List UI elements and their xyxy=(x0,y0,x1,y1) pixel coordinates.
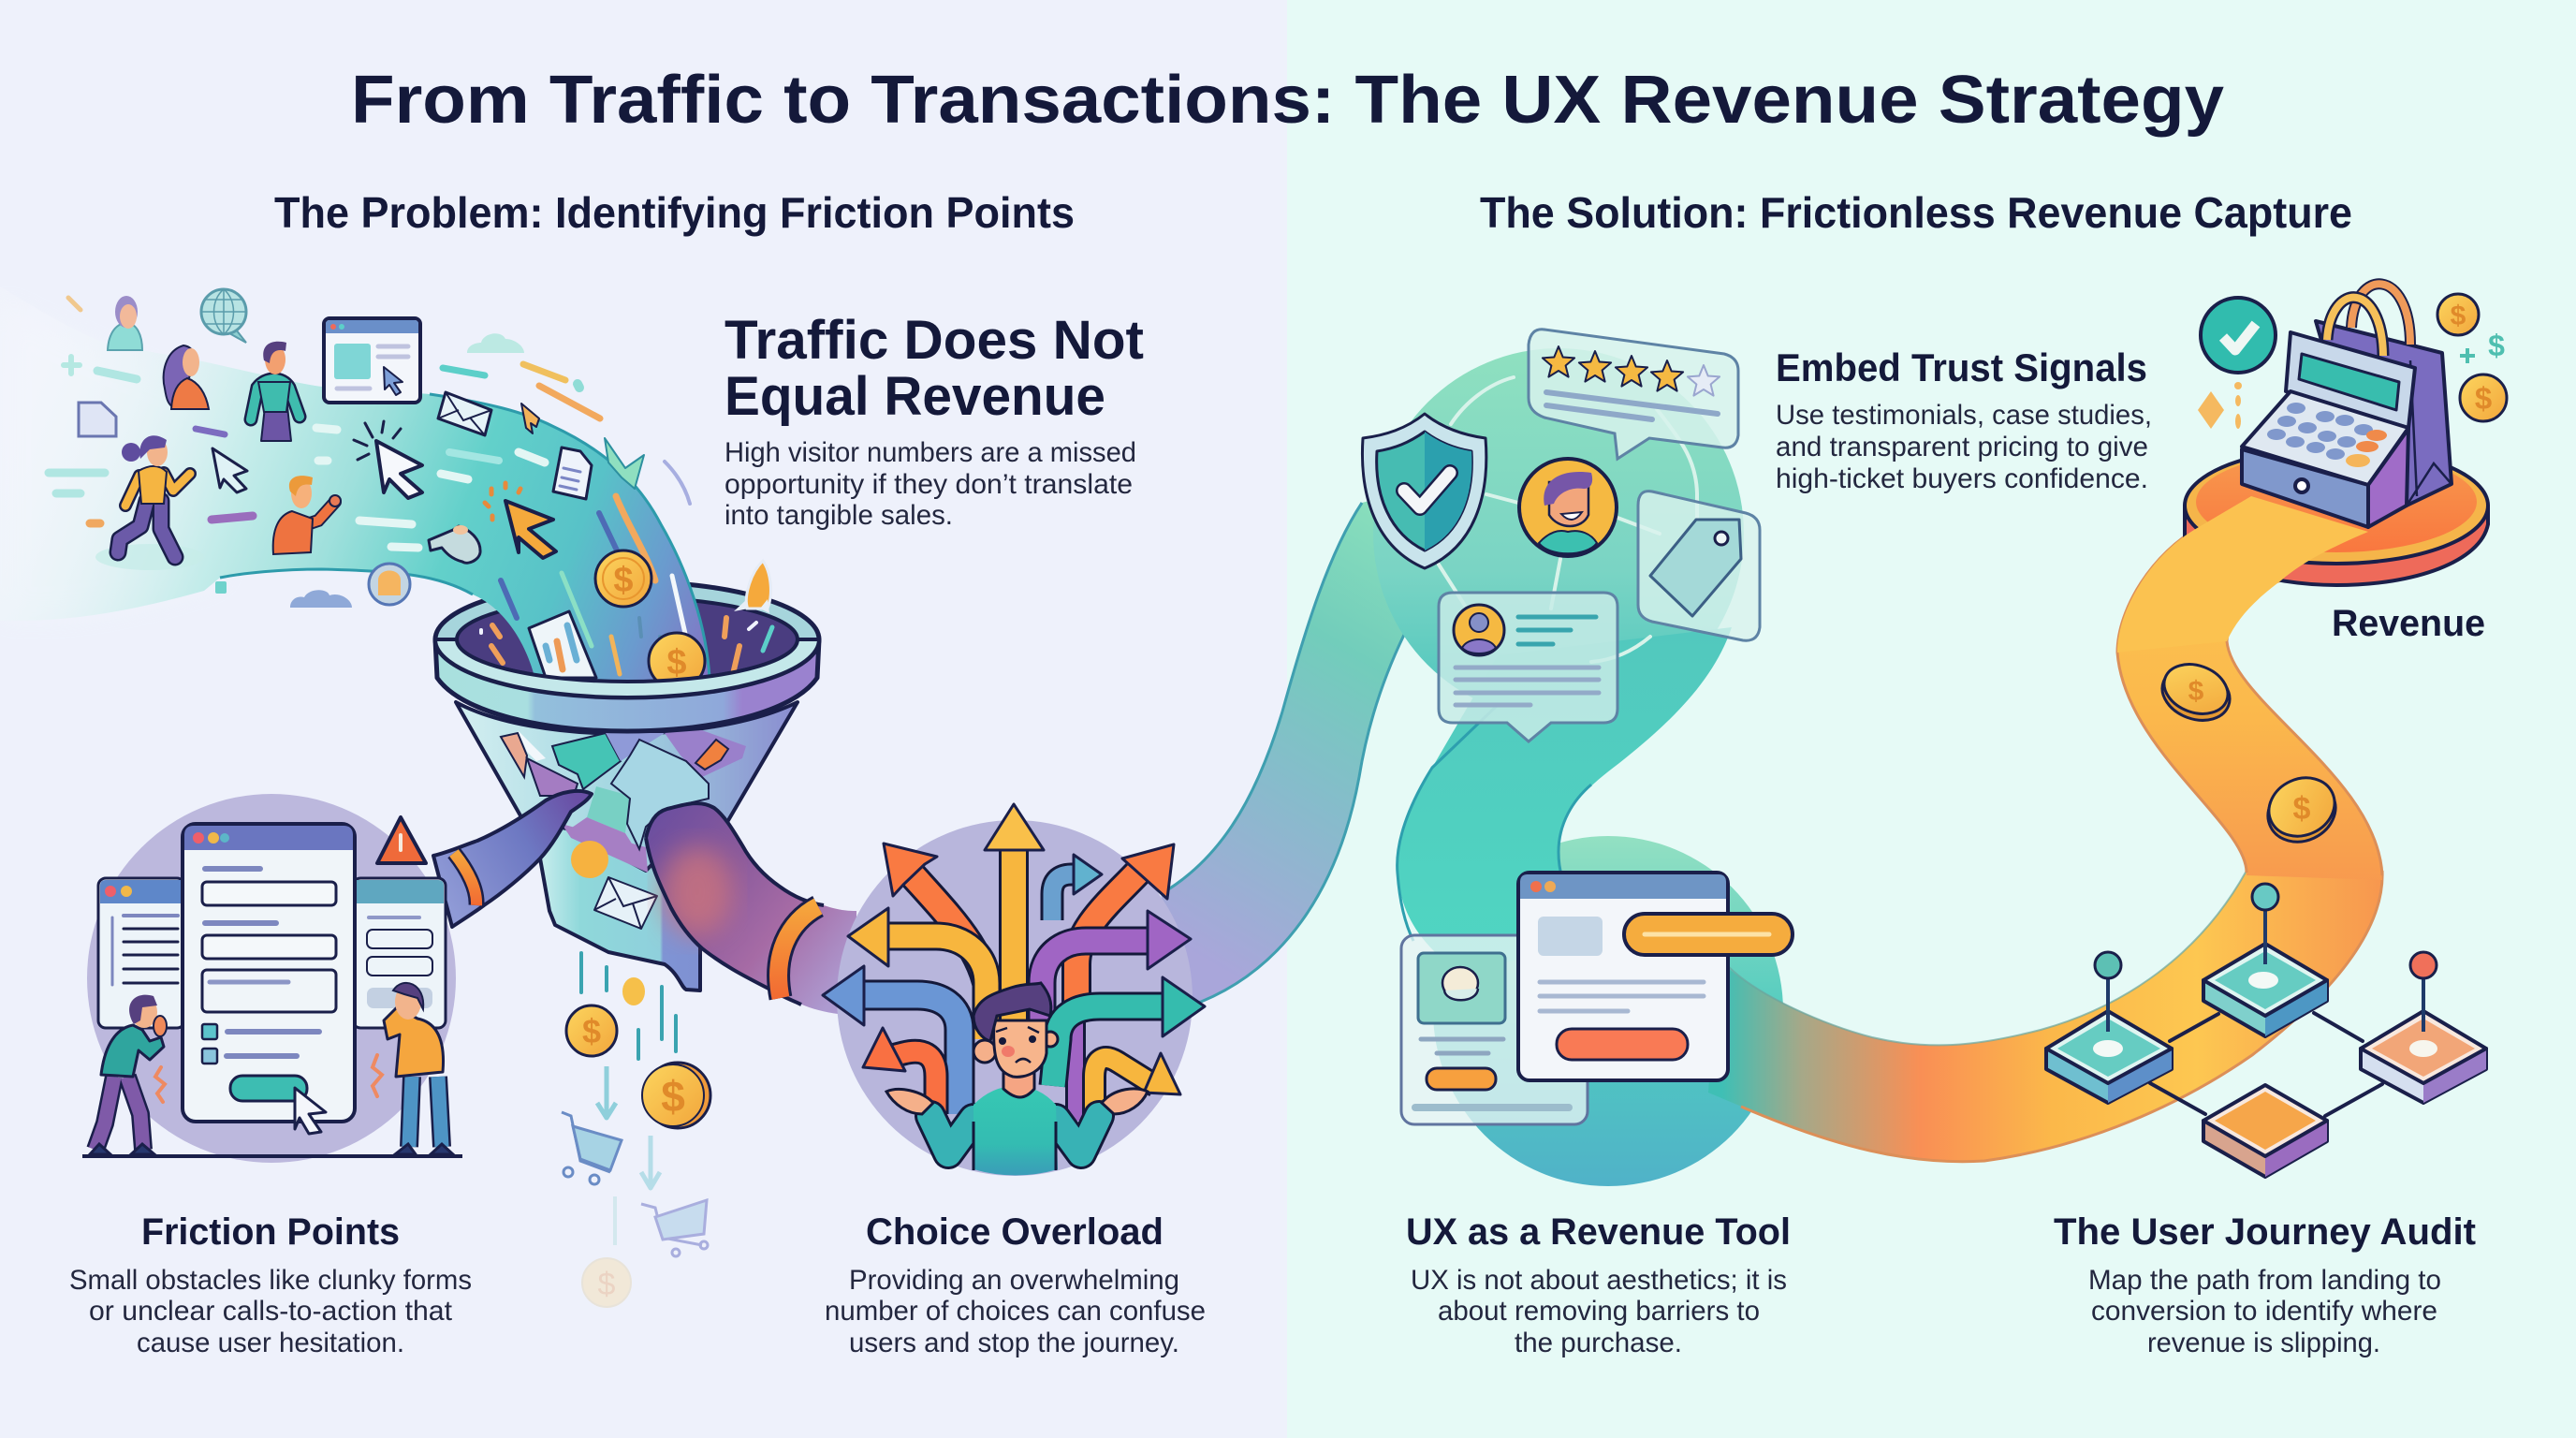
floor line xyxy=(82,1154,462,1158)
label: revenue: Revenue xyxy=(2332,603,2485,644)
text block: choice overload: users and stop the journey. xyxy=(849,1328,1179,1358)
lilac circle xyxy=(837,820,1193,1176)
text block: embed trust signals: Use testimonials, case studies, xyxy=(1776,400,2152,431)
text block: the user journey audit xyxy=(2054,1211,2476,1358)
icon: envelope xyxy=(438,392,491,435)
arrow: small orange left xyxy=(863,1028,936,1114)
text block: traffic does not equal revenue: Equal Revenue xyxy=(724,366,1105,427)
lilac circle xyxy=(87,794,456,1163)
revenue channel: teal curve xyxy=(1398,627,1732,974)
icon: shopping cart xyxy=(562,1112,622,1184)
text block: the user journey audit: The User Journey Audit xyxy=(2054,1211,2476,1253)
icon: file xyxy=(79,403,116,436)
icon: hand pointer xyxy=(429,525,480,563)
text block: friction points: cause user hesitation. xyxy=(137,1328,404,1358)
text block: embed trust signals xyxy=(1776,345,2152,494)
panel: friction points illustration xyxy=(82,794,462,1163)
background: right solution panel xyxy=(1287,0,2576,1438)
person: confused user xyxy=(886,983,1148,1176)
funnel back rim xyxy=(435,581,819,697)
icon: faded coin xyxy=(582,1258,631,1307)
text block: embed trust signals: high-ticket buyers confidence. xyxy=(1776,463,2148,494)
text block: embed trust signals: Embed Trust Signals xyxy=(1776,345,2147,389)
stream dashes xyxy=(49,298,690,674)
funnel front rim xyxy=(435,639,819,731)
shield with check xyxy=(1362,414,1486,568)
text block: choice overload xyxy=(825,1211,1206,1358)
funnel confetti xyxy=(481,618,772,674)
register xyxy=(2242,298,2415,527)
icon: large coin xyxy=(642,1063,710,1128)
icon: coin on path xyxy=(2155,656,2237,729)
line faded xyxy=(613,1196,617,1245)
icon: teal dollar and plus: $ xyxy=(2488,329,2505,362)
icon: avatar xyxy=(108,296,142,350)
stream band xyxy=(0,286,710,688)
falling coins and carts xyxy=(562,953,710,1307)
person: man in orange xyxy=(273,476,341,554)
person: left frustrated user xyxy=(90,995,167,1154)
text block: friction points: Friction Points xyxy=(141,1211,400,1253)
text block: friction points xyxy=(69,1211,472,1358)
price tag card xyxy=(1638,492,1760,640)
right pipe from funnel to choice panel xyxy=(646,803,856,1016)
node: bottom xyxy=(2203,1085,2327,1177)
platform xyxy=(2185,448,2488,585)
arrow: small yellow right xyxy=(1094,1053,1180,1119)
text block: traffic does not equal revenue xyxy=(724,310,1144,531)
heading: the problem: The Problem: Identifying Friction Points xyxy=(274,188,1075,237)
icon: coin xyxy=(566,1005,617,1056)
text block: friction points: or unclear calls-to-action that xyxy=(89,1296,453,1327)
text block: UX as a revenue tool: UX as a Revenue Tool xyxy=(1406,1211,1791,1253)
wisp haze xyxy=(0,300,225,619)
icon: orange tag xyxy=(521,404,539,433)
person: man in teal xyxy=(251,342,300,441)
text block: UX as a revenue tool: about removing barriers to xyxy=(1438,1296,1760,1327)
text block: UX as a revenue tool xyxy=(1406,1211,1791,1358)
text block: friction points: Small obstacles like clunky forms xyxy=(69,1265,472,1296)
icon: coin in stream xyxy=(595,550,651,607)
icon: rocket xyxy=(734,561,770,613)
warning triangle xyxy=(377,817,426,863)
arrow: purple right xyxy=(1042,911,1191,1030)
arrow: teal right xyxy=(1053,977,1205,1086)
icon: browser window xyxy=(324,318,420,403)
arrow: blue left xyxy=(823,966,959,1114)
icon: coin in funnel: $ xyxy=(666,643,687,682)
panel: user journey audit illustration xyxy=(2046,884,2486,1177)
icon: coin on path: $ xyxy=(2188,676,2204,707)
node: right xyxy=(2361,952,2486,1103)
icon: coin: $ xyxy=(582,1012,601,1050)
icon: lower cloud xyxy=(290,590,352,608)
stream edges xyxy=(430,394,710,679)
icon: document xyxy=(553,448,592,499)
panel: traffic stream xyxy=(0,286,819,990)
icon: sparkle xyxy=(2198,382,2242,429)
arrow: small blue turn xyxy=(1052,855,1102,920)
funnel cone xyxy=(456,702,798,871)
icon: coin lower xyxy=(2460,374,2507,421)
icon: check badge xyxy=(2201,298,2276,373)
background: left problem panel xyxy=(0,0,1287,1438)
text block: UX as a revenue tool: UX is not about aesthetics; it is xyxy=(1411,1265,1787,1296)
panel: trust signals icons xyxy=(1362,330,1760,741)
left window xyxy=(98,878,184,1028)
icon: globe bubble xyxy=(201,289,246,343)
arrow: yellow left xyxy=(848,908,987,1039)
testimonial card xyxy=(1439,593,1617,741)
arrow: purple vertical xyxy=(1065,1020,1086,1121)
right window xyxy=(353,878,446,1028)
icon: teal dollar and plus xyxy=(2460,329,2505,363)
text block: traffic does not equal revenue: High visitor numbers are a missed xyxy=(724,437,1136,468)
revenue channel: lavender to teal band xyxy=(1161,468,1498,1006)
title: From Traffic to Transactions: The UX Revenue Strategy xyxy=(351,63,2224,138)
arrow: yellow centre xyxy=(985,804,1044,1039)
revenue channel: teal to orange sweep xyxy=(1708,871,2382,1162)
person: runner in yellow xyxy=(95,435,204,570)
icon: faded coin: $ xyxy=(598,1267,616,1302)
text block: embed trust signals: and transparent pricing to give xyxy=(1776,432,2148,462)
icon: coin on path lower xyxy=(2258,768,2346,853)
connectors xyxy=(2150,1013,2382,1116)
icon: coin lower: $ xyxy=(2475,381,2492,416)
revenue channel: golden S curve xyxy=(2117,520,2382,880)
icon: circle badge xyxy=(369,564,410,605)
text block: traffic does not equal revenue: opportunity if they don’t translate xyxy=(724,469,1133,500)
node: top xyxy=(2203,884,2327,1036)
icon: coin upper: $ xyxy=(2451,301,2466,331)
arrow: orange up-right xyxy=(1076,844,1174,1006)
arrow: orange up-left xyxy=(884,844,990,1006)
text block: the user journey audit: Map the path from landing to xyxy=(2088,1265,2441,1296)
main form window xyxy=(183,824,355,1134)
network lines xyxy=(1439,377,1697,662)
left pipe from friction panel to funnel xyxy=(433,791,592,927)
icon: envelope in funnel xyxy=(594,877,657,929)
icon: coin in stream: $ xyxy=(613,561,634,600)
funnel shreds xyxy=(501,730,746,878)
text block: choice overload: number of choices can confuse xyxy=(825,1296,1206,1327)
person: right frustrated user xyxy=(384,983,453,1154)
icon: white cursor with clicks xyxy=(354,421,422,498)
UX disc xyxy=(1433,836,1783,1186)
icon: cloud xyxy=(467,333,524,353)
yellow pill xyxy=(1624,914,1793,955)
icon: paper plane xyxy=(605,438,644,489)
path end on platform xyxy=(2117,496,2368,653)
bag xyxy=(2316,284,2452,506)
person: woman in orange xyxy=(164,345,209,409)
avatar circle xyxy=(1519,459,1617,556)
icon: coin upper xyxy=(2437,294,2479,335)
panel: choice overload illustration xyxy=(823,804,1205,1176)
text block: the user journey audit: revenue is slipping. xyxy=(2147,1328,2380,1358)
text block: traffic does not equal revenue: into tangible sales. xyxy=(724,500,953,531)
icon: bar chart card xyxy=(529,611,596,678)
funnel lower fabric xyxy=(540,824,700,990)
arrow down faded xyxy=(641,1136,660,1188)
node: left xyxy=(2046,952,2172,1103)
panel: revenue register xyxy=(2117,284,2507,653)
icon: coin on path lower: $ xyxy=(2293,791,2311,827)
rating bubble xyxy=(1529,330,1738,459)
icon: coin in funnel xyxy=(649,633,705,689)
trust signals disc xyxy=(1373,348,1744,719)
funnel dark interior xyxy=(457,597,798,682)
main window xyxy=(1518,873,1728,1080)
icon: orange cursor xyxy=(485,483,556,558)
text block: the user journey audit: conversion to identify where xyxy=(2091,1296,2437,1327)
text block: choice overload: Providing an overwhelming xyxy=(849,1265,1179,1296)
small card xyxy=(1401,935,1588,1124)
text block: UX as a revenue tool: the purchase. xyxy=(1515,1328,1682,1358)
icon: small cursor xyxy=(212,448,247,492)
text block: traffic does not equal revenue: Traffic Does Not xyxy=(724,310,1144,371)
icon: large coin: $ xyxy=(661,1072,685,1121)
icon: small falling coin xyxy=(622,977,645,1005)
arrow down xyxy=(597,1066,616,1118)
panel: UX as a revenue tool illustration xyxy=(1401,873,1793,1124)
squiggles xyxy=(155,1055,382,1102)
text block: choice overload: Choice Overload xyxy=(866,1211,1164,1253)
icon: faded cart xyxy=(641,1200,708,1256)
heading: the solution: The Solution: Frictionless Revenue Capture xyxy=(1480,188,2352,237)
